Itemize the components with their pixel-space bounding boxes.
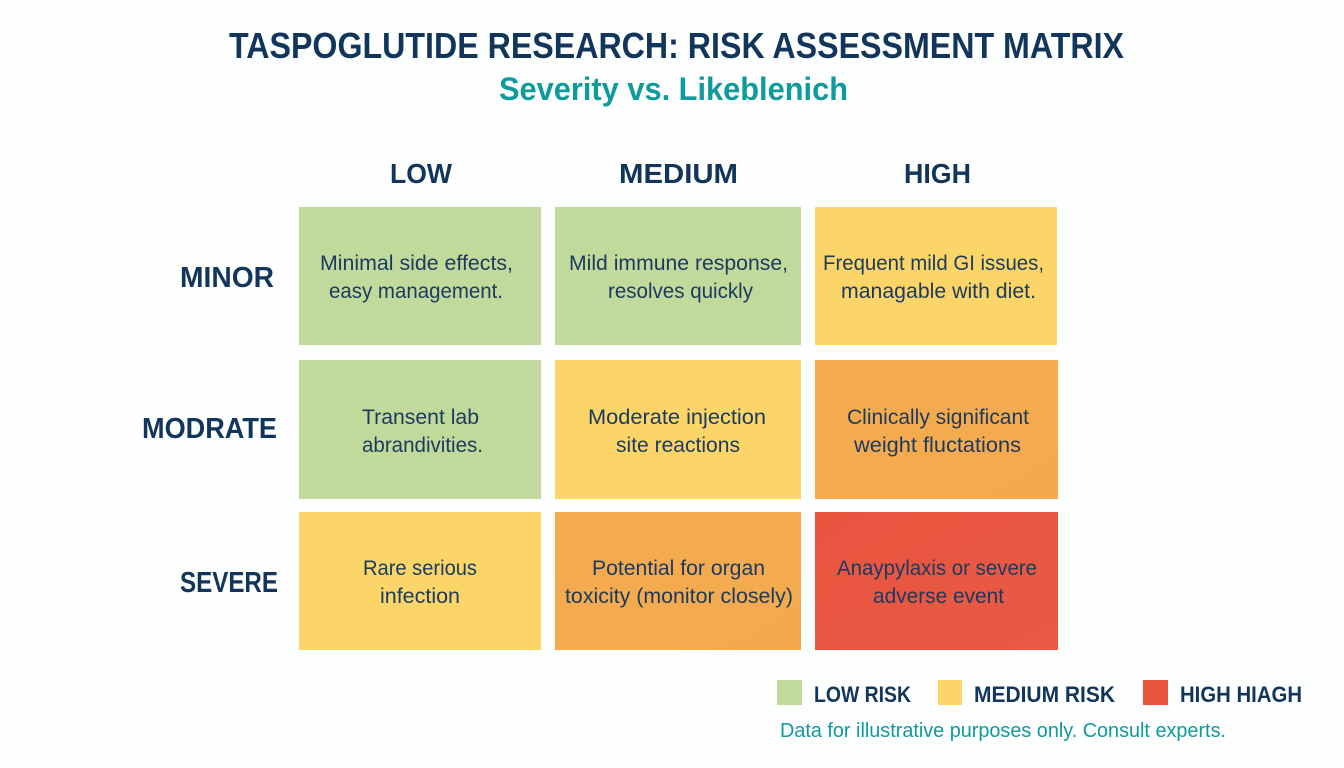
risk matrix (299, 207, 1058, 650)
cell: severe, high likelihood: Anaypylaxis or severe (837, 557, 1037, 580)
cell: severe, high likelihood (815, 512, 1058, 650)
cell: moderate, low likelihood (299, 360, 541, 499)
legend item: low risk: LOW RISK (814, 682, 911, 707)
cell: minor, medium likelihood (555, 207, 801, 345)
cell: moderate, low likelihood: abrandivities. (362, 434, 483, 457)
cell: minor, low likelihood: easy management. (329, 280, 503, 303)
cell: moderate, medium likelihood: site reactions (616, 434, 740, 457)
cell: severe, medium likelihood (555, 512, 801, 650)
cell: minor, high likelihood (815, 207, 1057, 345)
column headers: LOW (390, 158, 453, 189)
title: TASPOGLUTIDE RESEARCH: RISK ASSESSMENT MATRIX (229, 25, 1124, 66)
cell: moderate, high likelihood: Clinically significant (847, 406, 1029, 429)
legend (777, 680, 1302, 707)
cell: severe, medium likelihood: toxicity (monitor closely) (565, 585, 793, 608)
cell: minor, medium likelihood: Mild immune response, (569, 252, 788, 275)
row headers: MINOR (180, 262, 274, 294)
row headers: MODRATE (142, 413, 277, 445)
column headers: MEDIUM (619, 158, 738, 189)
footnote: Data for illustrative purposes only. Consult experts. (780, 720, 1226, 742)
cell: moderate, high likelihood (815, 360, 1058, 499)
column headers: HIGH (904, 158, 971, 189)
subtitle: Severity vs. Likeblenich (499, 71, 848, 107)
cell: minor, high likelihood: Frequent mild GI issues, (823, 252, 1044, 275)
cell: severe, medium likelihood: Potential for organ (592, 557, 765, 580)
cell: severe, high likelihood: adverse event (873, 585, 1004, 608)
legend item: high risk: HIGH HIAGH (1180, 682, 1302, 707)
cell: minor, low likelihood (299, 207, 541, 345)
legend item: high risk (1143, 680, 1302, 707)
column headers (390, 158, 971, 189)
cell: moderate, medium likelihood: Moderate injection (588, 406, 766, 429)
cell: severe, low likelihood: infection (380, 585, 460, 608)
cell: minor, low likelihood: Minimal side effects, (320, 252, 513, 275)
row headers (142, 262, 278, 599)
cell: minor, high likelihood: managable with diet. (841, 280, 1036, 303)
cell: severe, low likelihood: Rare serious (363, 557, 477, 580)
legend item: low risk (777, 680, 911, 707)
cell: moderate, high likelihood: weight fluctations (853, 434, 1021, 457)
cell: severe, low likelihood (299, 512, 541, 650)
legend item: medium risk: MEDIUM RISK (974, 682, 1115, 707)
cell: minor, medium likelihood: resolves quickly (608, 280, 753, 303)
cell: moderate, low likelihood: Transent lab (362, 406, 479, 429)
row headers: SEVERE (180, 567, 278, 599)
cell: moderate, medium likelihood (555, 360, 801, 499)
